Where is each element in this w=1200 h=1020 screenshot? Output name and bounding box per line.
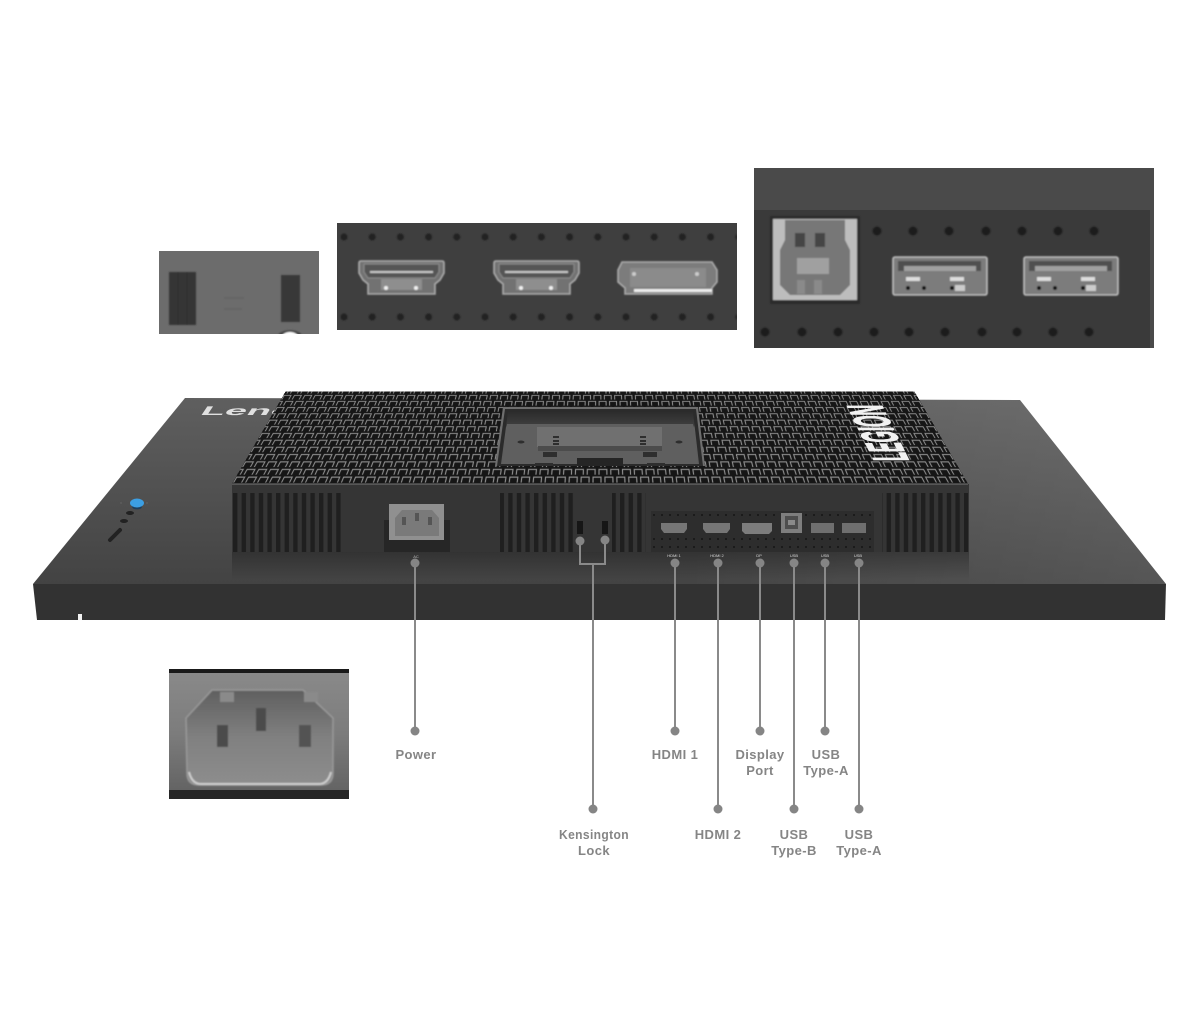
front face [232,484,969,552]
callout: HDMI 1 [652,558,698,762]
monitor panel [33,398,1166,620]
callout: USB Type-A lower [836,558,882,858]
callout: HDMI 1: HDMI 1 [652,747,698,762]
tiny silk-screen labels: USB [790,553,798,558]
tiny silk-screen labels: DP [756,553,762,558]
inset: power socket close-up [169,669,349,799]
tiny silk-screen labels: HDMI 2 [710,553,725,558]
inset: Kensington lock slots close-up [159,251,319,334]
tiny silk-screen labels: USB [821,553,829,558]
power socket [384,504,450,559]
callout: USB Type-B: USB [780,827,808,842]
monitor rear view [33,392,1166,620]
port: USB Type-B [781,513,802,533]
callout: USB Type-A upper: USB [812,747,840,762]
callout: USB Type-A lower: Type-A [836,843,882,858]
port panel [651,511,874,558]
callout: USB Type-B [771,558,817,858]
VESA mount recess [495,407,705,466]
callout: Kensington Lock: Kensington [559,827,629,842]
inset: USB ports close-up [754,168,1154,348]
callout: HDMI 2 [695,558,741,842]
tiny silk-screen labels: HDMI 1 [667,553,682,558]
tiny silk-screen labels: USB [854,553,862,558]
blue power button [120,498,154,509]
port: DisplayPort [742,523,772,534]
callout: USB Type-A upper [803,558,849,778]
vents [233,493,968,552]
port: USB Type-A [811,523,834,533]
perforated mesh back cover [232,392,968,484]
port: USB Type-A second [842,523,866,533]
callout: USB Type-A upper: Type-A [803,763,849,778]
Kensington lock slots [577,521,608,534]
callout: Display Port [735,558,785,778]
tiny silk-screen labels [667,553,862,558]
callout: Display Port: Port [746,763,774,778]
callout: USB Type-A lower: USB [845,827,873,842]
callout: Kensington Lock: Lock [578,843,610,858]
callout: Display Port: Display [735,747,785,762]
Lenovo bezel logo: Leno [197,404,300,418]
callout: Power: Power [395,747,437,762]
port: HDMI 1 [661,523,687,533]
callout: Kensington Lock [559,536,629,858]
power socket: AC [413,554,419,559]
inset: HDMI and DisplayPort close-up [337,223,737,330]
callout: Power [395,558,437,762]
port: HDMI 2 [703,523,730,533]
callout: USB Type-B: Type-B [771,843,817,858]
callout: HDMI 2: HDMI 2 [695,827,741,842]
rear housing [232,405,969,559]
